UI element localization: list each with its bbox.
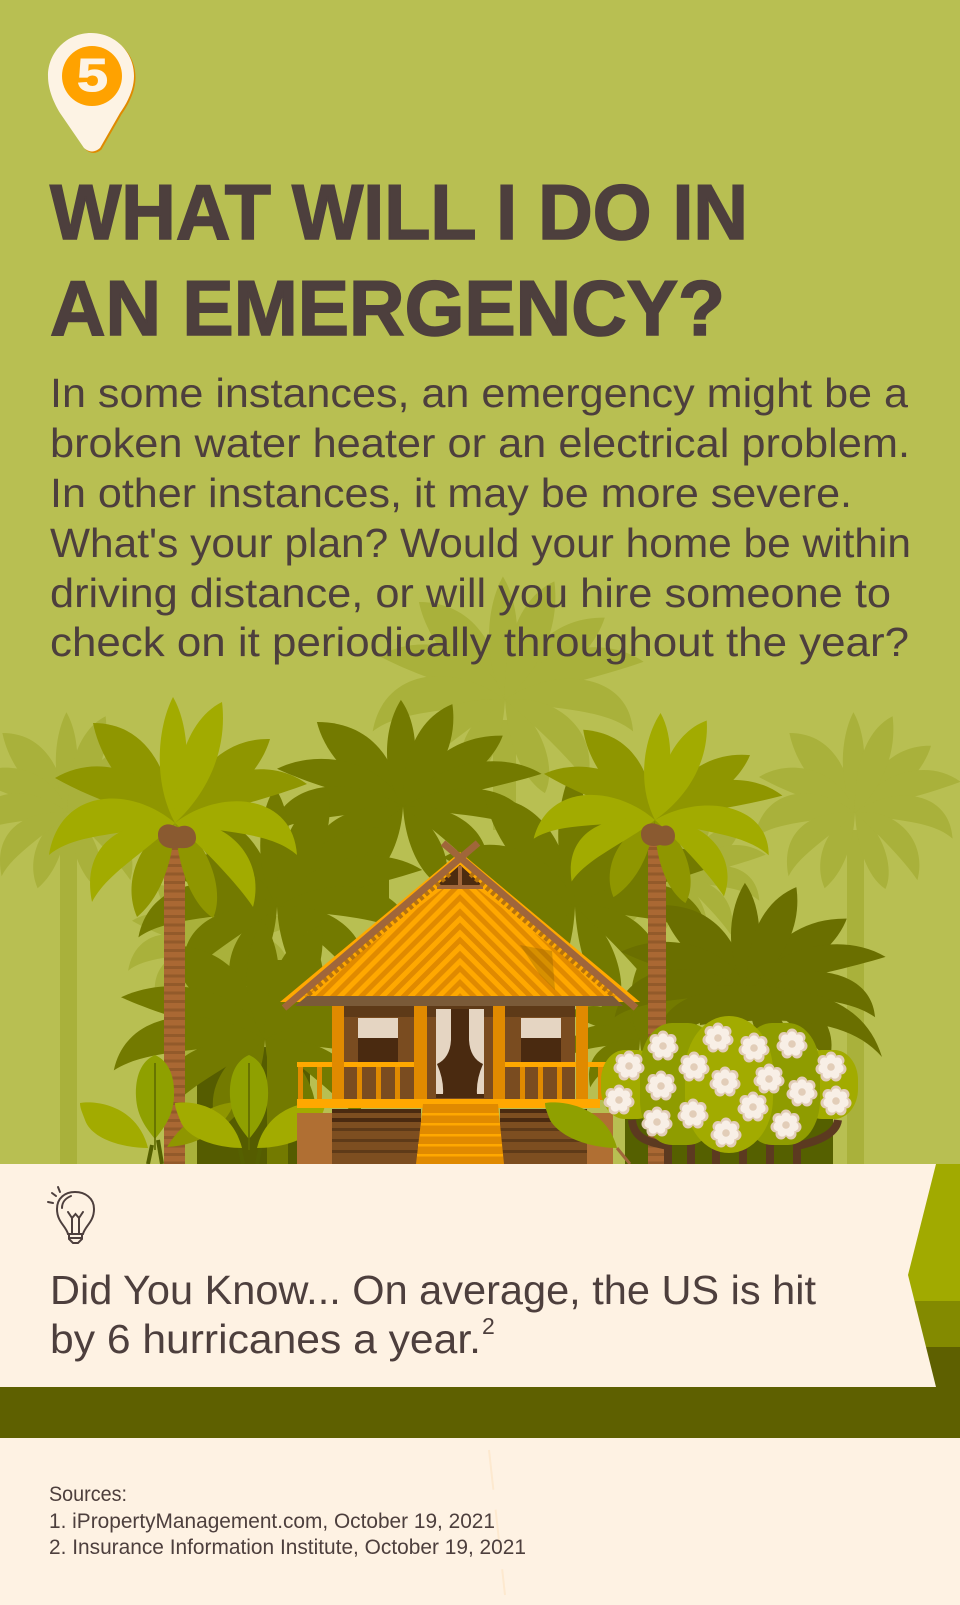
- title: WHAT WILL I DO IN: [50, 168, 748, 256]
- intro paragraph: In some instances, an emergency might be a: [50, 370, 908, 416]
- flowering bush: [601, 1016, 858, 1164]
- title: AN EMERGENCY?: [50, 264, 725, 352]
- location pin with number 5: [48, 33, 136, 153]
- sources: 1. iPropertyManagement.com, October 19, 2021: [49, 1510, 495, 1533]
- railings: [297, 1062, 608, 1100]
- sources: Sources:: [49, 1483, 127, 1506]
- front stairs: [416, 1104, 504, 1164]
- intro paragraph: broken water heater or an electrical problem.: [50, 420, 910, 466]
- icon: light bulb: [48, 1187, 94, 1243]
- did you know text: 2: [482, 1313, 495, 1339]
- banana leaf right of stairs: [545, 1102, 630, 1164]
- did you know text: [50, 1267, 817, 1362]
- intro paragraph: check on it periodically throughout the year?: [50, 619, 909, 665]
- did you know banner: [0, 1164, 936, 1387]
- intro paragraph: In other instances, it may be more severe.: [50, 470, 852, 516]
- deck and foundation: [297, 1099, 613, 1164]
- intro paragraph: What's your plan? Would your home be within: [50, 520, 911, 566]
- banana plants left: [80, 1055, 325, 1164]
- sources: [49, 1483, 526, 1559]
- dark band: [0, 1387, 960, 1438]
- walls and posts: [332, 1006, 588, 1100]
- did you know text: Did You Know... On average, the US is hit: [50, 1267, 817, 1313]
- roof: [280, 843, 640, 1008]
- tall palm tree left: [49, 697, 307, 1164]
- dark palm silhouettes: [114, 700, 833, 1164]
- distant palm trees: [0, 577, 960, 1164]
- house: [280, 843, 640, 1164]
- faint dashed line: [489, 1450, 505, 1595]
- title: [50, 168, 748, 352]
- fan palm behind bush: [615, 883, 886, 1071]
- tall palm tree right: [530, 705, 788, 1164]
- location pin with number 5: 5: [77, 49, 108, 101]
- intro paragraph: driving distance, or will you hire someone to: [50, 570, 891, 616]
- flowers: [604, 1022, 852, 1148]
- sources: 2. Insurance Information Institute, October 19, 2021: [49, 1536, 526, 1559]
- intro paragraph: [50, 370, 911, 665]
- footer panel: [0, 1438, 960, 1605]
- did you know text: by 6 hurricanes a year.: [50, 1316, 481, 1362]
- ribbon tail: [900, 1164, 960, 1387]
